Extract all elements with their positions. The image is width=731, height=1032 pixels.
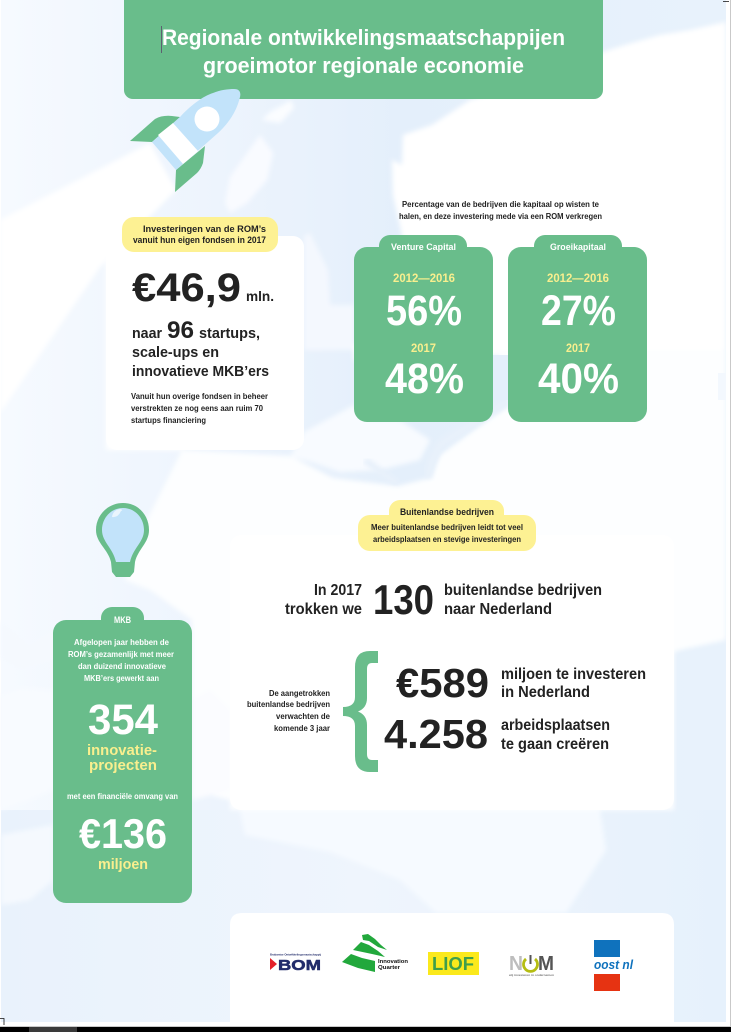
logo: NOM	[508, 953, 554, 977]
panel: groeikapitaal: 27%	[541, 287, 616, 335]
expectation note: buitenlandse bedrijven	[247, 699, 330, 709]
expectation note	[247, 688, 331, 733]
panel: groeikapitaal: Groeikapitaal	[550, 242, 606, 253]
logo: Innovation Quarter: Innovation	[378, 959, 409, 965]
panel: groeikapitaal: 2012—2016	[547, 271, 609, 285]
expectation note: verwachten de	[276, 711, 330, 721]
big number: €46,9	[132, 266, 241, 310]
panel: MKB: met een financiële omvang van	[67, 791, 178, 801]
panel: MKB	[53, 607, 192, 903]
MKB intro text	[68, 637, 175, 683]
stat: 130 companies	[285, 576, 602, 623]
tag: buitenlandse bedrijven: Buitenlandse bedrijven	[400, 506, 494, 517]
logo: LIOF: LIOF	[432, 954, 474, 974]
logo: BOM: Brabantse Ontwikkelingsmaatschappij	[270, 952, 321, 956]
panel: eigen fondsen	[106, 217, 304, 450]
MKB intro text: dan duizend innovatieve	[78, 661, 166, 671]
stat: investment: miljoen te investeren	[501, 666, 646, 683]
stat: jobs: 4.258	[384, 711, 488, 757]
overige fondsen note: Vanuit hun overige fondsen in beheer	[131, 391, 269, 401]
panel: buitenlandse bedrijven	[230, 500, 674, 810]
logo: BOM	[270, 952, 321, 974]
stat: 130 companies: 130	[373, 576, 434, 623]
panel: logos	[230, 913, 674, 1022]
stat: jobs: arbeidsplaatsen	[501, 717, 610, 734]
panel: MKB: miljoen	[98, 856, 148, 873]
icon: rocket	[130, 89, 240, 192]
stat: jobs	[384, 711, 610, 757]
icon: curly brace	[343, 651, 378, 772]
capital intro text: Percentage van de bedrijven die kapitaal op wisten te	[402, 199, 599, 209]
logo: NOM: N	[509, 953, 523, 975]
overige fondsen note	[131, 391, 269, 425]
capital intro text: halen, en deze investering mede via een ROM verkregen	[399, 211, 602, 221]
title: Regionale ontwikkelingsmaatschappijen	[162, 25, 565, 50]
panel: venture capital: 2017	[411, 341, 436, 355]
stat: 130 companies: In 2017	[314, 582, 362, 599]
startups text: scale-ups en	[132, 344, 219, 361]
expectation note: De aangetrokken	[269, 688, 330, 698]
MKB intro text: ROM’s gezamenlijk met meer	[68, 649, 175, 659]
logo: BOM: BOM	[278, 957, 321, 974]
logo: oost nl	[594, 940, 633, 991]
stat: 130 companies: trokken we	[285, 601, 362, 618]
panel: venture capital: 2012—2016	[393, 271, 455, 285]
panel: venture capital: 48%	[385, 355, 464, 403]
tag: buitenlandse bedrijven: Meer buitenlandse bedrijven leidt tot veel	[371, 522, 523, 532]
stat: investment	[396, 660, 646, 706]
stat: 130 companies: naar Nederland	[444, 601, 552, 618]
panel: MKB: 354	[88, 696, 158, 744]
stat: 130 companies: buitenlandse bedrijven	[444, 582, 602, 599]
title	[162, 25, 565, 78]
panel: MKB: innovatie-	[87, 742, 157, 759]
logo: NOM: M	[538, 953, 554, 975]
capital intro text	[399, 199, 602, 221]
panel: venture capital: Venture Capital	[391, 242, 456, 253]
title: groeimotor regionale economie	[203, 53, 524, 78]
big number: mln.	[246, 288, 274, 304]
panel: groeikapitaal	[508, 235, 647, 422]
logo: NOM: wij investeren in ondernemen	[508, 973, 554, 977]
MKB intro text: Afgelopen jaar hebben de	[74, 637, 169, 647]
stat: investment: €589	[396, 660, 489, 706]
panel: venture capital: 56%	[386, 287, 462, 335]
panel: venture capital	[354, 235, 493, 422]
startups text: startups,	[199, 325, 260, 342]
expectation note: komende 3 jaar	[274, 723, 331, 733]
overige fondsen note: startups financiering	[131, 415, 206, 425]
overige fondsen note: verstrekten ze nog eens aan ruim 70	[131, 403, 263, 413]
tag: investeringen	[122, 217, 278, 252]
startups text	[132, 317, 269, 380]
tag: investeringen: vanuit hun eigen fondsen in 2017	[133, 235, 266, 245]
stat: investment: in Nederland	[501, 684, 590, 701]
header banner	[124, 0, 603, 99]
tag: buitenlandse bedrijven	[358, 500, 536, 551]
startups text: innovatieve MKB’ers	[132, 363, 269, 380]
panel: groeikapitaal: 2017	[566, 341, 590, 355]
startups text: 96	[167, 317, 194, 344]
panel: groeikapitaal: 40%	[538, 355, 619, 403]
MKB intro text: MKB’ers gewerkt aan	[84, 673, 159, 683]
logo: oost nl: oost nl	[594, 957, 633, 972]
tag: investeringen: Investeringen van de ROM’s	[143, 224, 266, 234]
panel: MKB: MKB	[114, 615, 131, 625]
icon: light bulb	[96, 503, 149, 577]
panel: MKB: €136	[79, 810, 167, 857]
logo: Innovation Quarter: Quarter	[378, 965, 401, 971]
tag: buitenlandse bedrijven: arbeidsplaatsen en stevige investeringen	[373, 534, 521, 544]
panel: MKB: projecten	[89, 757, 157, 774]
stat: jobs: te gaan creëren	[501, 736, 609, 753]
logo: Innovation Quarter	[342, 934, 409, 972]
startups text: naar	[132, 325, 162, 342]
logo: LIOF	[428, 952, 479, 975]
